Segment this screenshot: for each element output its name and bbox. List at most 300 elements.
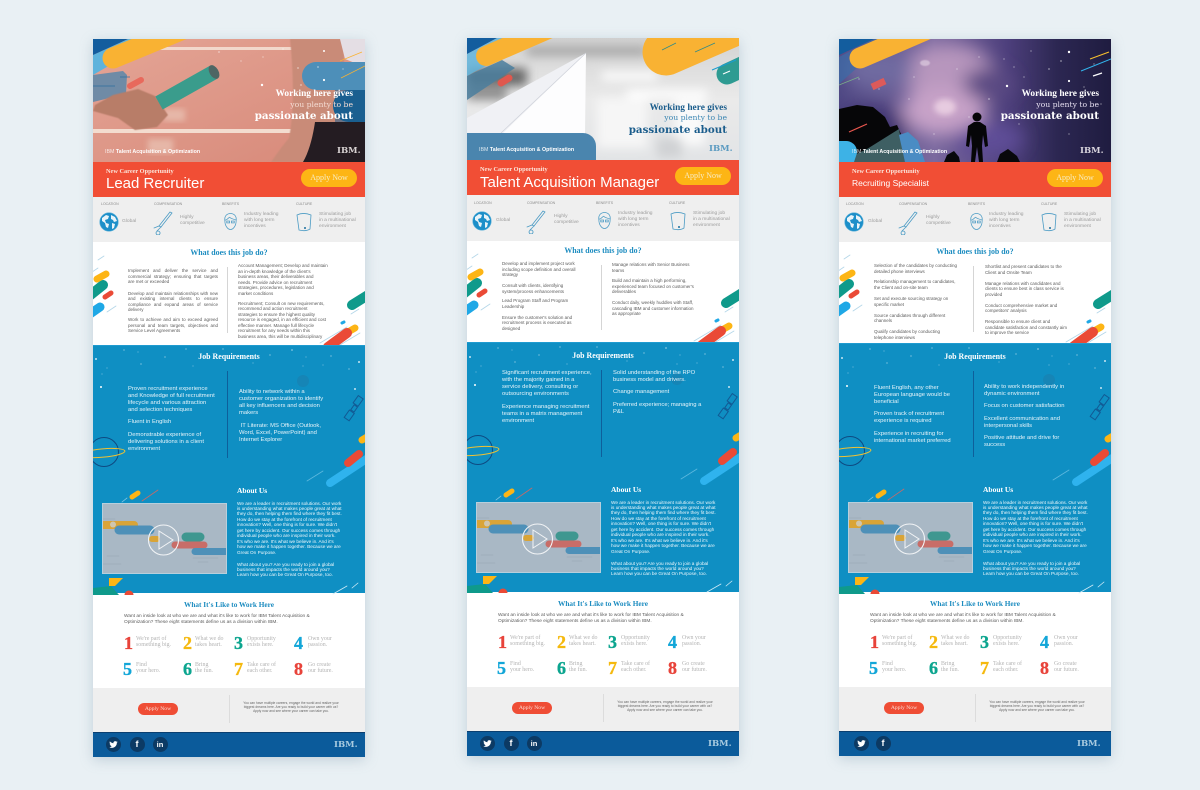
list: eight statements: Own your (308, 636, 332, 642)
banner: job title (93, 162, 365, 197)
text: about us: individual people who are inspired in their work. (983, 532, 1082, 537)
text: duties right column: an in-depth knowledge of the client's (238, 268, 311, 274)
text: closing note: biggest dreams here. Are you ready to build your career with us? (618, 704, 712, 708)
footer: social links: in (531, 739, 537, 748)
text: duties left column: Develop and implement project work (502, 261, 575, 266)
list: eight statements: something big. (136, 642, 171, 648)
text: requirements right: business model and drivers. (613, 377, 686, 383)
key facts strip: Global (496, 218, 510, 223)
text: requirements right: Word, Excel, PowerPoint) and (239, 430, 317, 436)
text: duties right column: experienced team focused on customer's (612, 284, 694, 289)
key facts strip: BENEFITS (968, 202, 985, 206)
text: about us: It's who we are. It's what we believe in. And it's (983, 538, 1080, 543)
list: eight statements: Own your (1054, 635, 1078, 641)
panel: Talent Acquisition Manager: designed (502, 326, 520, 331)
list: eight statements: 6 (557, 658, 566, 678)
list: eight statements: your hero. (882, 667, 906, 673)
text: requirements right: Focus on customer satisfaction (984, 403, 1065, 409)
text: intro: Want an inside look at who we are and what it's like to work for IBM Talent Acquisition & (498, 613, 684, 618)
text: closing note: You can have multiple careers, engage the world and realize your (617, 700, 713, 704)
text: duties left column: commercial strategy; ensuring that targets (128, 274, 218, 278)
text: requirements left: service delivery, consulting or (502, 384, 578, 390)
text: intro: Want an inside look at who we are and what it's like to work for IBM Talent Acquisition & (124, 614, 310, 619)
banner: job title: New Career Opportunity (106, 168, 174, 175)
list: eight statements: What we do (569, 635, 597, 641)
text: about us: What about you? Are you ready to join a global (983, 560, 1080, 566)
hero: night sky: passionate about (1001, 110, 1099, 122)
key facts strip: Stimulating job (319, 212, 351, 217)
text: about us: Great On Purpose. (983, 549, 1022, 554)
key facts strip: with long term (244, 218, 274, 223)
list: eight statements: exists here. (621, 641, 648, 647)
text: duties right column: Account Management; Develop and maintain (238, 263, 328, 268)
key facts strip: with long term (989, 218, 1019, 223)
key facts strip (467, 195, 739, 241)
text: requirements left: with the majority gained in a (502, 377, 574, 383)
hero: night sky: Working here gives (1022, 89, 1099, 99)
text: requirements right: interpersonal skills (984, 423, 1032, 429)
list: eight statements: the fun. (569, 667, 587, 673)
text: closing note (617, 700, 713, 712)
text: duties left column: delivery (128, 307, 144, 312)
text: requirements right: Preferred experience; managing a (613, 402, 701, 408)
text: closing note: biggest dreams here. Are you ready to build your career with us? (990, 704, 1084, 708)
text: about us: individual people who are inspired in their work. (611, 532, 710, 537)
panel: Talent Acquisition Manager: Learn how you can be Great On Purpose, too. (611, 571, 707, 576)
text: duties left column: Qualify candidates by conducting (874, 329, 940, 334)
heading: what it's like: What It's Like to Work Here (558, 599, 648, 608)
heading: what does this job do: What does this job do? (936, 247, 1014, 256)
text: about us: innovation? Well, one thing is for sure. We didn't (237, 522, 337, 527)
hero: night sky (839, 39, 1111, 162)
text: requirements right: Solid understanding of the RPO (613, 370, 695, 376)
heading: job requirements: Job Requirements (944, 352, 1006, 361)
text: about us (611, 485, 716, 576)
key facts strip: in a multinational (1064, 218, 1101, 223)
list: eight statements: the fun. (195, 668, 213, 674)
text: requirements left (128, 386, 215, 452)
list: eight statements: Take care of (621, 661, 650, 667)
text: about us (237, 486, 342, 577)
hero: paper plane (467, 38, 739, 160)
text: duties left column: Lead Program Staff and Program (502, 298, 568, 303)
hero: relay baton: passionate about (255, 110, 353, 122)
text: duties left column: specific market (874, 302, 904, 306)
text: about us: How do we stay at the forefront of recruitment (611, 516, 706, 521)
hero: relay baton: you plenty to be (290, 100, 353, 109)
text: requirements right (613, 370, 702, 415)
button: apply now: Apply Now (891, 704, 917, 710)
text: duties right column: Manage relations with Senior Business (612, 262, 690, 267)
text: duties left column (502, 261, 576, 331)
section: job requirements background (839, 343, 1111, 592)
list: eight statements: 8 (668, 658, 677, 678)
footer: social links: f (882, 738, 884, 748)
list: eight statements: passion. (308, 642, 327, 648)
list: eight statements: 7 (234, 659, 243, 679)
list: eight statements: What we do (941, 635, 969, 641)
panel: Recruiting Specialist: Learn how you can be Great On Purpose, too. (983, 571, 1079, 576)
list: eight statements: Opportunity (621, 635, 650, 641)
text: requirements left: European language would be (874, 392, 950, 398)
text: duties right column: strategies, procedures, legislation and (238, 285, 314, 290)
banner: job title (467, 160, 739, 195)
text: requirements left: teams in a matrix management (502, 411, 582, 417)
key facts strip: environment (693, 223, 720, 228)
key facts strip: COMPENSATION (899, 202, 927, 206)
text: intro: Want an inside look at who we are and what it's like to work for IBM Talent Acquisition & (870, 613, 1056, 618)
text: requirements left: delivering solutions in a client (128, 439, 204, 445)
footer: social links: in (157, 740, 163, 749)
text: duties left column: compliance and expand areas of service (128, 302, 218, 306)
list: eight statements: 5 (497, 658, 506, 678)
text: duties right column: Client and Onsite Team (985, 270, 1032, 274)
key facts strip: COMPENSATION (527, 201, 555, 205)
list: eight statements (869, 632, 1079, 678)
text: duties right column: as appropriate (612, 311, 641, 316)
text: about us: business that impacts the world around you? (237, 567, 330, 572)
footer: social links: f (510, 738, 512, 748)
video thumbnail (102, 503, 227, 574)
banner: job title: Apply Now (310, 173, 348, 182)
text: requirements left: Proven recruitment experience (128, 386, 208, 392)
text: intro (498, 612, 684, 624)
text: duties left column: Set and execute sourcing strategy on (874, 296, 948, 301)
text: duties right column (238, 263, 328, 339)
text: requirements left: outsourcing environments (502, 391, 569, 397)
panel: Recruiting Specialist (839, 39, 1111, 756)
list: eight statements: 8 (294, 659, 303, 679)
text: requirements left: environment (502, 418, 534, 424)
text: duties right column: competitors' analysis (985, 308, 1027, 313)
text: duties right column: Conduct daily, weekly huddles with Staff, (612, 300, 693, 305)
text: requirements right (984, 384, 1065, 448)
text: duties left column: Develop and maintain relationships with new (128, 290, 218, 296)
list: eight statements: 6 (183, 659, 192, 679)
key facts strip: in a multinational (319, 218, 356, 223)
banner: job title: Apply Now (684, 171, 722, 180)
text: about us: innovation? Well, one thing is for sure. We didn't (611, 521, 711, 526)
panel: Recruiting Specialist: telephone interviews (874, 334, 915, 340)
hero: paper plane: Working here gives (650, 103, 727, 113)
list: eight statements: 4 (294, 633, 303, 653)
text: requirements left: lifecycle and various attraction (128, 400, 206, 406)
text: duties left column: Consult with clients, identifying (502, 283, 563, 288)
key facts strip: Stimulating job (693, 211, 725, 216)
key facts strip: Global (122, 219, 136, 224)
button: apply now (138, 702, 178, 714)
hero: night sky: IBM. (1080, 146, 1104, 156)
text: duties left column: including scope definition and overall (502, 266, 576, 272)
list: eight statements: each other. (247, 668, 273, 674)
text: about us: What about you? Are you ready to join a global (237, 562, 334, 566)
hero: night sky: IBM Talent Acquisition & Optimization (852, 149, 947, 155)
list: eight statements: Take care of (247, 662, 276, 668)
text: duties right column: needs. Provide advice on recruitment (238, 280, 312, 284)
list: eight statements: passion. (682, 641, 701, 647)
text: requirements right (239, 389, 324, 443)
list: eight statements: Bring (569, 661, 582, 667)
text: about us: innovation? Well, one thing is for sure. We didn't (983, 521, 1083, 526)
text: duties right column: business area, this will be multidisciplinary (238, 334, 322, 338)
list: eight statements: Find (136, 662, 147, 668)
text: requirements left: beneficial (874, 399, 899, 405)
list: eight statements: each other. (993, 667, 1019, 673)
heading: what does this job do: What does this job do? (190, 248, 268, 257)
list: eight statements: the fun. (941, 667, 959, 673)
text: intro (870, 612, 1056, 624)
list: eight statements: 2 (929, 632, 938, 652)
text: closing note: Apply now and see where your career can take you. (999, 708, 1075, 712)
text: requirements left: experience is required (874, 418, 932, 424)
banner: job title: New Career Opportunity (852, 168, 920, 175)
banner: job title: Lead Recruiter (106, 175, 204, 192)
list: eight statements: 7 (980, 658, 989, 678)
list: eight statements: Take care of (993, 661, 1022, 667)
text: duties right column: cascading IBM and customer information (612, 306, 694, 311)
list: eight statements: 4 (1040, 632, 1049, 652)
text: duties right column: recruitment for any needs within this (238, 328, 310, 333)
panel: Talent Acquisition Manager (467, 38, 739, 756)
text: duties left column: detailed phone interviews (874, 268, 925, 274)
list: eight statements: 1 (498, 632, 507, 652)
footer: social links (93, 732, 365, 757)
list: eight statements: something big. (882, 641, 917, 647)
hero: paper plane: passionate about (629, 124, 727, 136)
list: eight statements: Bring (195, 662, 208, 668)
list: eight statements: 2 (557, 632, 566, 652)
list: eight statements: exists here. (247, 642, 274, 648)
key facts strip: LOCATION (474, 201, 492, 205)
list: eight statements: 7 (608, 658, 617, 678)
text: requirements left: and selection techniques (128, 407, 192, 413)
text: about us: How do we stay at the forefront of recruitment (237, 517, 332, 522)
text: about us: About Us (983, 485, 1013, 494)
text: duties right column: Shortlist and present candidates to the (985, 264, 1062, 269)
text: duties right column: Build and maintain a high performing, (612, 278, 687, 283)
text: requirements left: Proven track of recruitment (874, 411, 944, 417)
text: requirements left: Significant recruitment experience, (502, 370, 592, 376)
list: eight statements: What we do (195, 636, 223, 642)
text: duties right column: Recruitment; Consult on new requirements, (238, 300, 325, 306)
text: duties left column: system/process enhancements (502, 288, 564, 294)
list: eight statements: 5 (123, 659, 132, 679)
text: requirements right: success (984, 442, 1005, 448)
text: about us (983, 485, 1088, 576)
text: about us: how we make it happen together. Because we are (611, 543, 715, 548)
list: eight statements: 4 (668, 632, 677, 652)
list: eight statements: takes heart. (195, 642, 222, 648)
text: duties left column: and existing internal clients to ensure (128, 296, 218, 301)
list: eight statements: each other. (621, 667, 647, 673)
banner: job title: New Career Opportunity (480, 166, 548, 173)
text: duties right column: strategies to ensure the highest quality (238, 312, 315, 316)
call to action strip (467, 687, 739, 731)
text: requirements right: Ability to network within a (239, 389, 305, 395)
section: what does this job do (467, 254, 739, 342)
text: requirements right: Excellent communication and (984, 416, 1060, 422)
key facts strip: with long term (618, 217, 648, 222)
video thumbnail (476, 502, 601, 573)
key facts strip: incentives (618, 223, 640, 228)
text: about us: is understanding what makes people great at what (983, 505, 1088, 510)
button: apply now: Apply Now (519, 704, 545, 710)
text: about us: It's who we are. It's what we believe in. And it's (611, 538, 708, 543)
text: duties left column: are met or exceeded (128, 279, 169, 284)
text: about us: get here by accident. Our success comes through (237, 528, 340, 533)
list: eight statements: We're part of (882, 635, 912, 641)
text: duties right column: candidate satisfaction and constantly aim (985, 324, 1067, 330)
list: eight statements: 1 (870, 632, 879, 652)
key facts strip: competitive (180, 221, 205, 226)
button: apply now (884, 702, 924, 714)
text: about us: Great On Purpose. (237, 550, 276, 555)
key facts strip: CULTURE (296, 202, 312, 206)
text: duties left column (128, 268, 218, 333)
list: eight statements: something big. (510, 641, 545, 647)
footer: social links: IBM. (1077, 739, 1101, 749)
text: about us: It's who we are. It's what we believe in. And it's (237, 539, 334, 544)
footer: social links (839, 731, 1111, 756)
key facts strip: Global (868, 219, 882, 224)
banner: job title: Apply Now (1056, 173, 1094, 182)
text: about us: get here by accident. Our success comes through (611, 527, 714, 532)
text: requirements left: Experience managing recruitment (502, 404, 589, 410)
text: intro: Optimization? These eight statements define us as a division within IBM. (498, 619, 652, 624)
hero: paper plane: IBM Talent Acquisition & Optimization (479, 147, 574, 153)
button: apply now (512, 702, 552, 714)
list: eight statements (497, 632, 707, 678)
key facts strip: in a multinational (693, 217, 730, 222)
text: about us: individual people who are inspired in their work. (237, 533, 336, 538)
list: eight statements: takes heart. (941, 641, 968, 647)
footer: social links (467, 731, 739, 756)
key facts strip: Highly (554, 214, 568, 219)
text: duties right column: resource is engaged, in an efficient and cost (238, 317, 326, 322)
list: eight statements: Go create (308, 662, 331, 668)
key facts strip: Stimulating job (1064, 212, 1096, 217)
text: duties left column: Ensure the customer's solution and (502, 315, 572, 320)
text: duties right column: business areas, their deliverables and (238, 274, 314, 279)
text: closing note: Apply now and see where your career can take you. (627, 708, 703, 712)
text: duties right column: clients to ensure best in class service is (985, 286, 1064, 291)
panel: Lead Recruiter: Learn how you can be Great On Purpose, too. (237, 572, 333, 577)
text: requirements right: Ability to work independently in (984, 384, 1064, 390)
text: duties right column: Manage relations with candidates and (985, 281, 1061, 286)
footer: social links: f (136, 739, 138, 749)
text: about us: We are a leader in recruitment solutions. Our work (611, 500, 715, 504)
text: about us: We are a leader in recruitment solutions. Our work (237, 500, 341, 506)
text: requirements right: Positive attitude and drive for (984, 435, 1059, 441)
text: duties left column: Relationship management to candidates, (874, 279, 956, 284)
key facts strip: environment (1064, 224, 1091, 229)
key facts strip: Highly (180, 215, 194, 220)
text: duties right column: Responsible to ensure client and (985, 319, 1050, 324)
list: eight statements: exists here. (993, 641, 1020, 647)
text: duties right column: teams (612, 268, 624, 272)
footer: social links: IBM. (334, 740, 358, 750)
key facts strip: LOCATION (846, 202, 864, 206)
text: duties left column: Work to achieve and aim to exceed agreed (128, 317, 218, 322)
list: eight statements: takes heart. (569, 641, 596, 647)
key facts strip: Industry leading (244, 212, 279, 217)
list: eight statements: We're part of (510, 635, 540, 641)
text: duties right column (612, 262, 694, 316)
list: eight statements: Opportunity (247, 636, 276, 642)
hero: relay baton: IBM. (337, 146, 361, 156)
text: about us: How do we stay at the forefront of recruitment (983, 516, 1078, 521)
key facts strip: competitive (554, 220, 579, 225)
banner: job title: Talent Acquisition Manager (480, 174, 659, 191)
text: closing note (989, 700, 1085, 712)
text: duties left column: Selection of the candidates by conducting (874, 263, 957, 268)
text: duties left column: Source candidates through different (874, 313, 945, 318)
list: eight statements: 5 (869, 658, 878, 678)
text: duties left column: strategy (502, 272, 518, 277)
text: duties left column: personal and team targets, objectives and (128, 322, 218, 328)
text: closing note: You can have multiple careers, engage the world and realize your (989, 700, 1085, 704)
text: about us: About Us (611, 485, 641, 494)
list: eight statements: 2 (183, 633, 192, 653)
text: requirements left: Demonstrable experience of (128, 432, 201, 438)
key facts strip: Industry leading (618, 211, 653, 216)
text: about us: they do, then helping them find where they fit best. (983, 510, 1088, 515)
text: requirements left: and Knowledge of full recruitment (128, 393, 215, 399)
list: eight statements: 1 (124, 633, 133, 653)
text: duties left column: Service Level Agreements (128, 328, 180, 333)
list: eight statements: Own your (682, 635, 706, 641)
list: eight statements: your hero. (510, 667, 534, 673)
list: eight statements: 6 (929, 658, 938, 678)
list: eight statements: passion. (1054, 641, 1073, 647)
list: eight statements: Find (510, 661, 521, 667)
text: about us: is understanding what makes people great at what (611, 505, 716, 510)
video thumbnail (848, 502, 973, 573)
list: eight statements: 3 (234, 633, 243, 653)
list: eight statements: Find (882, 661, 893, 667)
text: requirements left (502, 370, 592, 424)
text: duties left column: Implement and deliver the service and (128, 268, 218, 273)
banner: job title (839, 162, 1111, 197)
text: about us: business that impacts the world around you? (611, 566, 704, 571)
list: eight statements: Bring (941, 661, 954, 667)
text: intro: Optimization? These eight statements define us as a division within IBM. (124, 620, 278, 625)
list: eight statements: 3 (980, 632, 989, 652)
list: eight statements: We're part of (136, 636, 166, 642)
text: duties left column: recruitment process is executed as (502, 320, 572, 325)
key facts strip: BENEFITS (222, 202, 239, 206)
text: closing note: You can have multiple careers, engage the world and realize your (243, 701, 339, 705)
key facts strip: BENEFITS (596, 201, 613, 205)
text: intro (124, 614, 310, 625)
key facts strip (839, 197, 1111, 242)
list: eight statements: Opportunity (993, 635, 1022, 641)
text: duties left column: Leadership (502, 304, 524, 309)
key facts strip: COMPENSATION (154, 202, 182, 206)
key facts strip: CULTURE (669, 201, 685, 205)
key facts strip: CULTURE (1041, 202, 1057, 206)
text: closing note: Apply now and see where your career can take you. (253, 709, 329, 713)
text: duties left column: the Client and on-site team (874, 285, 928, 290)
call to action strip (839, 687, 1111, 731)
panel: Recruiting Specialist: to improve the service (985, 330, 1029, 335)
text: duties right column: market conditions (238, 290, 273, 296)
key facts strip: Highly (926, 215, 940, 220)
text: duties right column (985, 264, 1067, 335)
text: requirements right: Change management (613, 389, 669, 395)
key facts strip: environment (319, 224, 346, 229)
key facts strip: Industry leading (989, 212, 1024, 217)
